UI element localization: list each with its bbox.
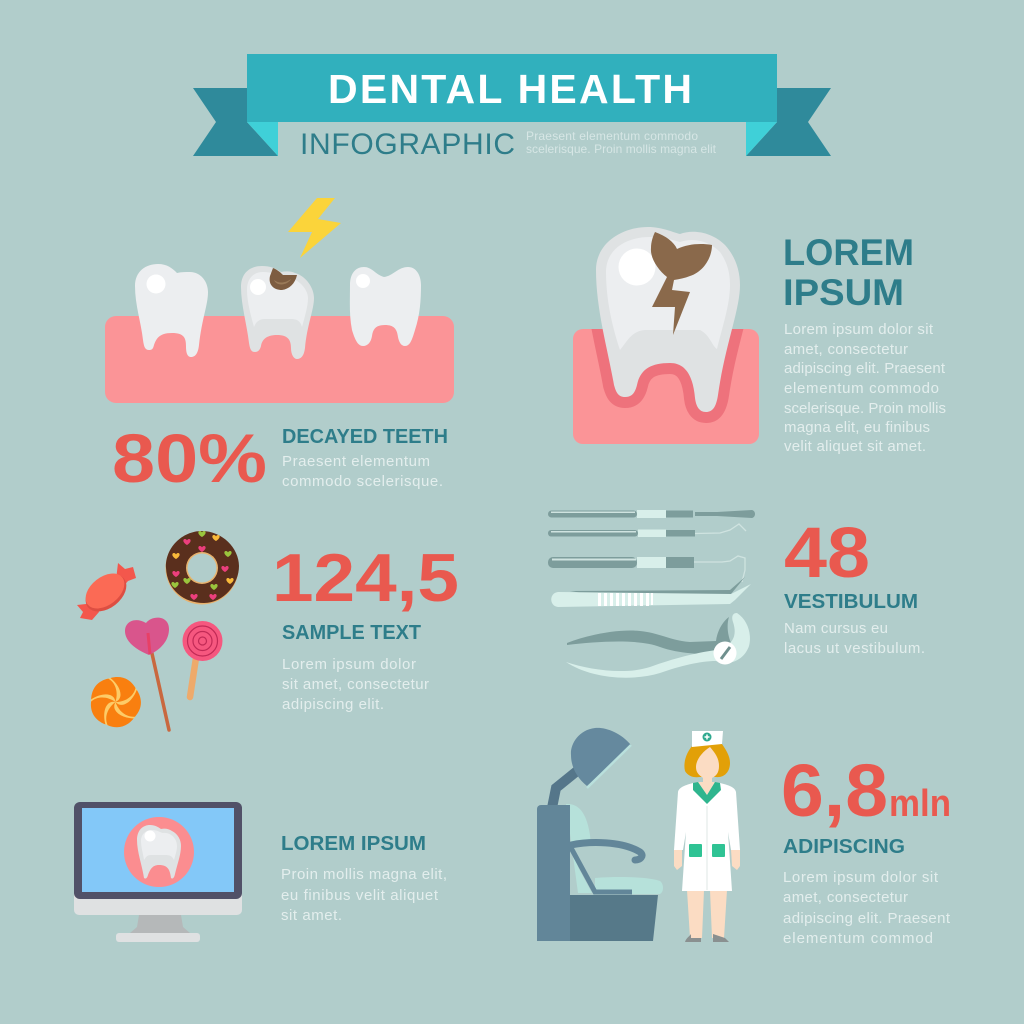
subtitle description: scelerisque. Proin mollis magna elit [526, 142, 717, 156]
extraction pliers [566, 613, 750, 678]
screen [82, 808, 234, 892]
cavity and crack [651, 232, 712, 335]
description: elementum commod [783, 930, 933, 947]
description: sit amet. [281, 907, 342, 924]
hair [684, 744, 730, 777]
coat [674, 783, 740, 891]
tooth outer [596, 227, 740, 412]
decayed tooth [241, 266, 314, 359]
heading: VESTIBULUM [784, 591, 918, 613]
lamp dome [571, 728, 631, 786]
ribbon left tail [193, 88, 278, 156]
illustration: nurse [674, 731, 740, 942]
lightning bolt [288, 198, 341, 258]
backrest [566, 804, 592, 893]
heading: LOREM IPSUM [281, 833, 426, 855]
wrapped candy [77, 563, 136, 620]
probe with straight tip [548, 510, 755, 518]
paragraph: lorem ipsum: scelerisque. Proin mollis [784, 400, 946, 417]
paragraph: lorem ipsum: amet, consectetur [784, 341, 908, 358]
stat: vestibulum [784, 514, 925, 657]
description: adipiscing elit. [282, 696, 384, 713]
paragraph: lorem ipsum: Lorem ipsum dolor sit [784, 321, 934, 338]
heading: lorem ipsum: IPSUM [783, 272, 904, 313]
lamp arm [552, 771, 577, 808]
chair column [537, 805, 570, 941]
value 6,8 mln: mln [889, 783, 951, 825]
ribbon main band [247, 54, 777, 122]
stand base [116, 933, 200, 942]
hands [674, 849, 740, 870]
description: sit amet, consectetur [282, 676, 429, 693]
value 6,8 mln [781, 749, 951, 832]
illustration: sweets [77, 531, 239, 734]
illustration: computer monitor with tooth [74, 802, 242, 942]
description: lacus ut vestibulum. [784, 640, 925, 657]
description: commodo scelerisque. [282, 473, 443, 490]
shoes [685, 934, 729, 942]
subtitle description: Praesent elementum commodo [526, 129, 698, 143]
illustration: tooth cross-section with crack [573, 227, 759, 444]
ribbon right fold [746, 122, 777, 156]
tweezers [551, 577, 751, 607]
value 124,5: 124,5 [272, 540, 459, 616]
paragraph: lorem ipsum: adipiscing elit. Praesent [784, 360, 946, 377]
swirl candy [85, 675, 145, 734]
description: Lorem ipsum dolor [282, 656, 416, 673]
round lollipop [182, 621, 222, 697]
paragraph: lorem ipsum: velit aliquet sit amet. [784, 438, 926, 455]
description: Proin mollis magna elit, [281, 866, 447, 883]
ribbon left fold [247, 122, 278, 156]
illustration: dental instruments [548, 510, 755, 678]
left pocket [689, 844, 702, 857]
stand neck [130, 915, 190, 933]
illustration: row of teeth in gum [105, 198, 454, 403]
gum [105, 316, 454, 403]
value 80%: 80% [112, 420, 267, 497]
legs [687, 890, 727, 938]
donut [166, 531, 239, 604]
description: Nam cursus eu [784, 620, 888, 637]
heading: ADIPISCING [783, 836, 905, 858]
title banner [193, 54, 831, 161]
gum block [573, 329, 759, 444]
gum pocket [592, 329, 744, 423]
lamp rim [587, 745, 631, 788]
neckline [698, 782, 715, 795]
coat buttons [706, 806, 708, 890]
text block: lorem ipsum [281, 833, 447, 924]
nurse cap [692, 731, 723, 747]
description: Lorem ipsum dolor sit [783, 869, 939, 886]
description: amet, consectetur [783, 889, 908, 906]
heart lollipop [125, 618, 169, 730]
illustration: dental chair [537, 728, 663, 941]
probe with long hook [548, 556, 745, 582]
value 48: 48 [784, 514, 870, 593]
heading: lorem ipsum: LOREM [783, 232, 914, 273]
tooth enamel [606, 237, 730, 350]
seat support [570, 846, 632, 892]
probe with short hook [548, 524, 746, 537]
tooth badge [124, 817, 194, 887]
description: Praesent elementum [282, 453, 430, 470]
healthy tooth [135, 264, 208, 357]
stat: decayed teeth [112, 420, 448, 497]
tooth highlight [618, 248, 656, 286]
subtitle: INFOGRAPHIC [300, 128, 515, 161]
paragraph: lorem ipsum: elementum commodo [784, 380, 939, 397]
description: eu finibus velit aliquet [281, 887, 439, 904]
stat: sample text [272, 540, 459, 713]
molar tooth [350, 267, 421, 346]
title: DENTAL HEALTH [328, 66, 692, 112]
tooth on badge [137, 825, 181, 879]
ribbon right tail [746, 88, 831, 156]
stat: adipiscing [781, 749, 951, 947]
collar [693, 782, 721, 804]
armrest [571, 843, 642, 860]
cap cross [702, 732, 712, 742]
value 6,8 mln: 6,8 [781, 749, 888, 832]
right pocket [712, 844, 725, 857]
monitor chin [74, 890, 242, 915]
chair base [570, 895, 658, 941]
infographic canvas [74, 54, 950, 943]
seat cushion [595, 877, 663, 894]
heading: SAMPLE TEXT [282, 622, 421, 644]
heading: DECAYED TEETH [282, 426, 448, 448]
monitor frame [74, 802, 242, 899]
description: adipiscing elit. Praesent [783, 910, 951, 927]
face and neck [696, 747, 719, 784]
paragraph: lorem ipsum: magna elit, eu finibus [784, 419, 930, 436]
